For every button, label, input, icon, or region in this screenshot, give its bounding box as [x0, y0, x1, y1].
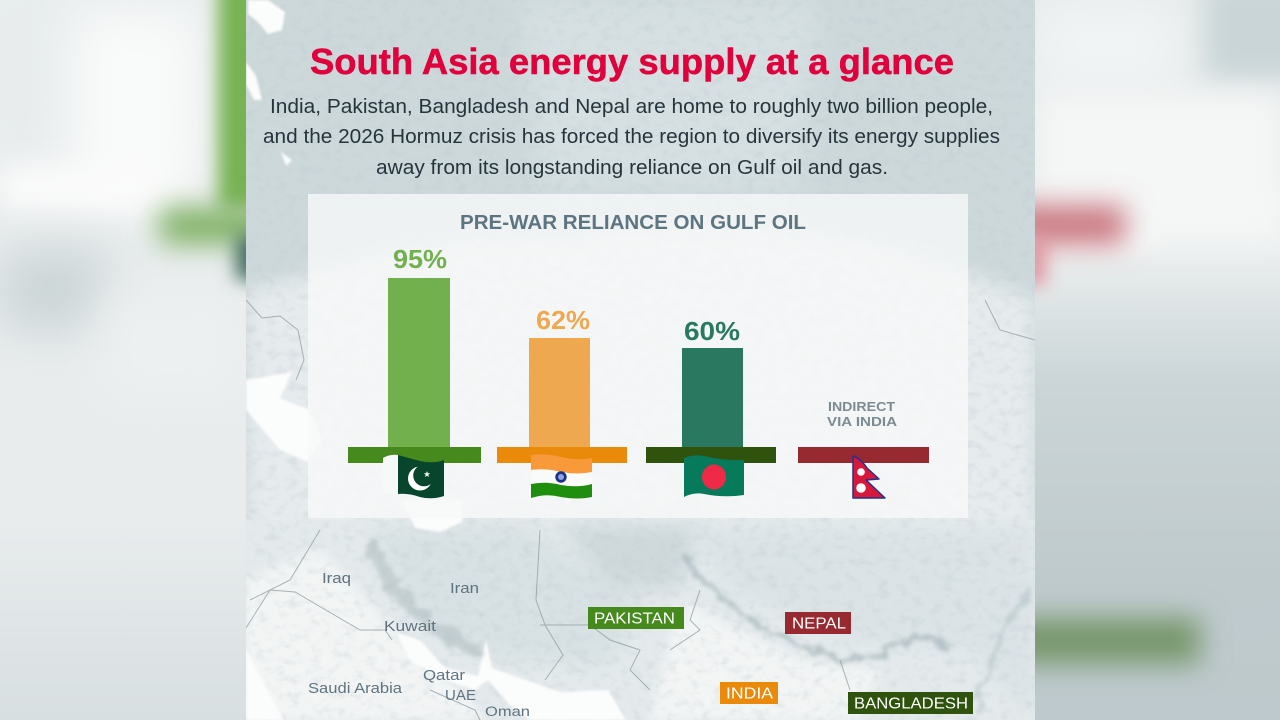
bar: Bangladesh 60%: 60%: [684, 316, 740, 346]
map label: Nepal: [785, 612, 851, 634]
bar: India 62%: [497, 305, 627, 463]
bar: Nepal indirect via India: [798, 400, 929, 463]
intro paragraph: [263, 96, 1000, 179]
intro paragraph: India, Pakistan, Bangladesh and Nepal are home to roughly two billion people,: [270, 96, 993, 118]
bar: Nepal indirect via India: VIA INDIA: [827, 415, 897, 429]
blurred right backdrop: [1035, 0, 1280, 720]
map: place names: Qatar: [423, 667, 465, 684]
map: pale northern land: [246, 269, 1035, 520]
map: pale band of upper map: [544, 20, 796, 170]
map label: Pakistan: PAKISTAN: [594, 610, 675, 628]
icon: Nepal flag: [853, 456, 885, 498]
map: place names: Kuwait: [384, 618, 437, 635]
map label: Pakistan: [588, 607, 684, 629]
icon: Bangladesh flag: [684, 455, 744, 497]
title: South Asia energy supply at a glance: [310, 41, 954, 82]
icon: India flag: [531, 454, 592, 498]
map: Himalaya ridge shading: [684, 556, 951, 658]
map background: [246, 0, 1035, 720]
bar: Bangladesh 60%: [646, 316, 776, 463]
map: terrain texture: [246, 0, 1035, 720]
map: Tibetan plateau shading: [718, 542, 1022, 682]
chart heading: PRE-WAR RELIANCE ON GULF OIL: [460, 212, 806, 234]
map: Iranian plateau shading: [384, 530, 630, 660]
map: Afghan highlands shading: [560, 525, 700, 590]
map: southern land: [246, 520, 1035, 720]
map: place names: Iraq: [322, 570, 351, 587]
blurred left backdrop: [0, 0, 246, 720]
map label: India: INDIA: [726, 686, 773, 702]
map: place names: Oman: [485, 704, 530, 719]
map: place names: Iran: [450, 580, 479, 597]
map: place names: UAE: [445, 687, 476, 704]
map: Arabia and India plains: [246, 550, 880, 720]
bar: Pakistan 95%: [348, 244, 481, 463]
panel: pre-war reliance chart: [308, 194, 968, 518]
map label: Bangladesh: BANGLADESH: [854, 696, 968, 712]
map label: Nepal: NEPAL: [792, 616, 846, 632]
bar: Pakistan 95%: 95%: [393, 244, 447, 274]
map label: India: [720, 682, 778, 704]
map: country borders: [246, 300, 1035, 720]
bar: India 62%: 62%: [536, 305, 590, 335]
icon: Pakistan flag: [383, 455, 444, 498]
intro paragraph: away from its longstanding reliance on Gulf oil and gas.: [376, 157, 888, 179]
map: place names: [308, 570, 530, 719]
map: white water bodies: [246, 0, 626, 720]
bar: Nepal indirect via India: INDIRECT: [828, 400, 895, 414]
map: place names: Saudi Arabia: [308, 680, 403, 697]
map label: Bangladesh: [848, 692, 973, 714]
map: eastern ridge shading: [975, 590, 1030, 715]
map: Zagros ridge shading: [370, 540, 480, 652]
intro paragraph: and the 2026 Hormuz crisis has forced the region to diversify its energy supplies: [263, 126, 1000, 148]
